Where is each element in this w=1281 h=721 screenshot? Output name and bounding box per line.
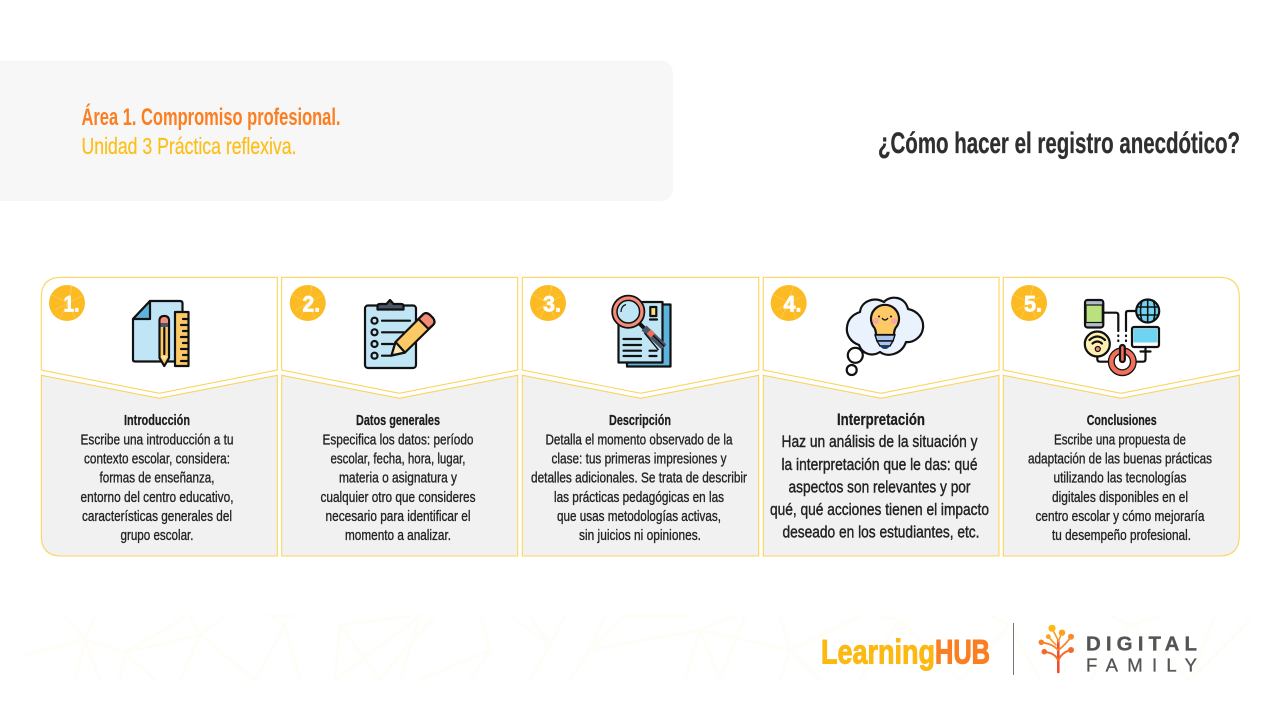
logo divider bbox=[1012, 623, 1014, 675]
card 3 body text: clase: tus primeras impresiones y bbox=[552, 450, 727, 468]
card 3 body text: Detalla el momento observado de la bbox=[546, 432, 733, 448]
card 3 body text: sin juicios ni opiniones. bbox=[579, 527, 701, 544]
header: unit subtitle: Unidad 3 Práctica reflexiva. bbox=[82, 133, 296, 159]
badge 3 bbox=[530, 285, 566, 321]
card 5 heading: Conclusiones bbox=[1087, 412, 1157, 429]
card 2 body text: necesario para identificar el bbox=[326, 508, 470, 525]
header panel bbox=[0, 60, 673, 201]
card 1 body text: formas de enseñanza, bbox=[100, 470, 214, 486]
card 5 body text: digitales disponibles en el bbox=[1052, 489, 1188, 506]
card 1 body text: contexto escolar, considera: bbox=[84, 450, 230, 468]
card 4 body text: la interpretación que le das: qué bbox=[782, 456, 978, 474]
icon: document with pencil and ruler bbox=[133, 301, 188, 366]
badge 5: 5. bbox=[1024, 292, 1042, 316]
card 4 body text: aspectos son relevantes y por bbox=[788, 478, 971, 496]
badge 2: 2. bbox=[303, 292, 320, 316]
card 4 body text: deseado en los estudiantes, etc. bbox=[782, 524, 980, 542]
card 2 body text: cualquier otro que consideres bbox=[320, 489, 476, 506]
card 3: Descripción bbox=[522, 277, 759, 556]
badge 3: 3. bbox=[543, 292, 561, 316]
card 3 body text: las prácticas pedagógicas en las bbox=[554, 489, 724, 506]
card 2 body text bbox=[320, 432, 476, 544]
badge 4: 4. bbox=[784, 292, 802, 316]
background pattern bbox=[25, 616, 1250, 680]
card 2: Datos generales bbox=[282, 277, 518, 556]
logo: LearningHUB: Learning bbox=[821, 634, 935, 672]
icon: clipboard with pencil bbox=[365, 300, 434, 368]
badge 2 bbox=[290, 285, 326, 321]
card 2 body text: materia o asignatura y bbox=[339, 470, 457, 486]
header: area title: Área 1. Compromiso profesional. bbox=[82, 103, 340, 131]
icon: magnifier over documents bbox=[612, 296, 670, 366]
card 1 body text: entorno del centro educativo, bbox=[80, 489, 234, 506]
logo: Digital Family tree bbox=[1038, 625, 1074, 672]
card 5 body text: Escribe una propuesta de bbox=[1054, 432, 1186, 448]
card 1 body text: características generales del bbox=[82, 508, 232, 525]
card 4 body text: qué, qué acciones tienen el impacto bbox=[770, 501, 989, 519]
card 2 body text: Especifica los datos: período bbox=[322, 432, 474, 448]
card 5 body text: utilizando las tecnologías bbox=[1054, 470, 1186, 486]
card 2 body text: escolar, fecha, hora, lugar, bbox=[330, 450, 466, 468]
icon: thought cloud with light bulb bbox=[847, 298, 923, 375]
card 3 heading: Descripción bbox=[609, 412, 671, 429]
card 2 heading: Datos generales bbox=[356, 412, 440, 429]
card 1: Introducción bbox=[41, 277, 277, 556]
card 4 body text bbox=[770, 433, 989, 542]
icon: connected devices bbox=[1085, 300, 1159, 373]
card 5 body text: adaptación de las buenas prácticas bbox=[1028, 450, 1212, 468]
card 3 body text: que usas metodologías activas, bbox=[557, 508, 721, 525]
card 4 heading: Interpretación bbox=[837, 411, 925, 429]
badge 5 bbox=[1011, 285, 1047, 321]
card 4: Interpretación bbox=[763, 277, 999, 556]
card 2 body text: momento a analizar. bbox=[345, 527, 451, 544]
badge 1: 1. bbox=[64, 292, 80, 316]
card 5 body text: tu desempeño profesional. bbox=[1052, 527, 1191, 544]
card 3 body text: detalles adicionales. Se trata de describir bbox=[531, 470, 747, 486]
card 5 body text bbox=[1028, 432, 1212, 544]
card 4 body text: Haz un análisis de la situación y bbox=[782, 433, 978, 451]
card 1 body text bbox=[80, 432, 234, 544]
badge 4 bbox=[771, 285, 807, 321]
card 5: Conclusiones bbox=[1003, 277, 1239, 556]
logo: LearningHUB: HUB bbox=[935, 634, 990, 672]
logo: DIGITAL wordmark: DIGITAL bbox=[1086, 633, 1197, 656]
card 3 body text bbox=[531, 432, 747, 544]
card 1 body text: grupo escolar. bbox=[120, 527, 194, 544]
card 1 body text: Escribe una introducción a tu bbox=[80, 432, 234, 448]
card 5 body text: centro escolar y cómo mejoraría bbox=[1036, 508, 1205, 525]
badge 1 bbox=[49, 285, 85, 321]
card 1 heading: Introducción bbox=[124, 412, 190, 429]
logo: FAMILY wordmark: FAMILY bbox=[1086, 655, 1197, 676]
